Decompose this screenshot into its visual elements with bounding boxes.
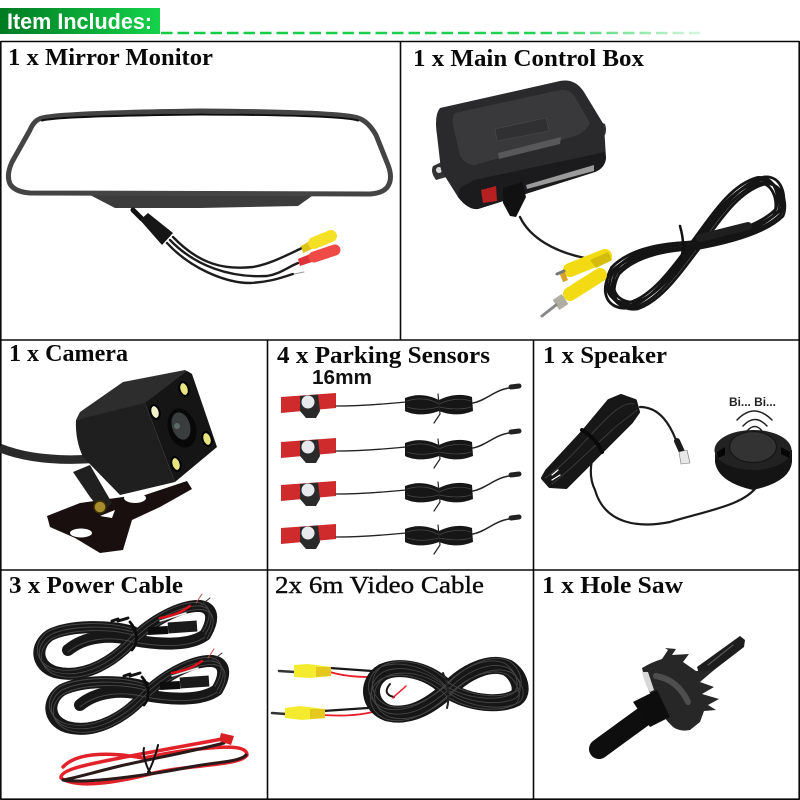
panel: hole saw xyxy=(542,572,745,749)
title: mirror monitor: 1 x Mirror Monitor xyxy=(8,44,213,71)
title: power cable: 3 x Power Cable xyxy=(9,572,183,599)
icon: power cable coil 1 xyxy=(37,594,213,677)
dashed divider xyxy=(161,32,700,34)
icon: video cable xyxy=(272,658,523,721)
sensor 2 xyxy=(281,431,519,468)
title: speaker: 1 x Speaker xyxy=(543,342,667,369)
icon: speaker xyxy=(543,396,792,524)
icon: hole saw xyxy=(599,636,745,749)
title: video cable: 2x 6m Video Cable xyxy=(275,572,484,599)
title: hole saw: 1 x Hole Saw xyxy=(542,572,683,599)
panel: video cable xyxy=(272,572,523,721)
title: parking sensors: 4 x Parking Sensors xyxy=(277,342,490,369)
title: main control box: 1 x Main Control Box xyxy=(413,45,645,72)
title: camera: 1 x Camera xyxy=(9,340,128,367)
icon: control box xyxy=(432,80,785,316)
icon: power cable coil 2 xyxy=(49,649,225,732)
panel: power cable xyxy=(9,572,247,784)
sound label: Bi... Bi... xyxy=(729,397,776,409)
sensor 4 xyxy=(281,517,519,554)
panel: camera xyxy=(0,340,217,553)
sensor size label: 16mm xyxy=(312,366,372,389)
header banner xyxy=(0,8,160,34)
panel: parking sensors xyxy=(277,342,519,554)
icon: mirror monitor xyxy=(8,111,391,283)
panel: main control box xyxy=(413,45,785,316)
header title: Item Includes: xyxy=(7,9,152,34)
icon: camera xyxy=(0,370,217,553)
sensor 1 xyxy=(281,386,519,423)
sensor 3 xyxy=(281,474,519,511)
icon: red and black cable xyxy=(61,733,247,784)
panel: mirror monitor xyxy=(8,44,390,283)
panel: speaker xyxy=(543,342,792,524)
icon: sound waves xyxy=(737,411,772,431)
